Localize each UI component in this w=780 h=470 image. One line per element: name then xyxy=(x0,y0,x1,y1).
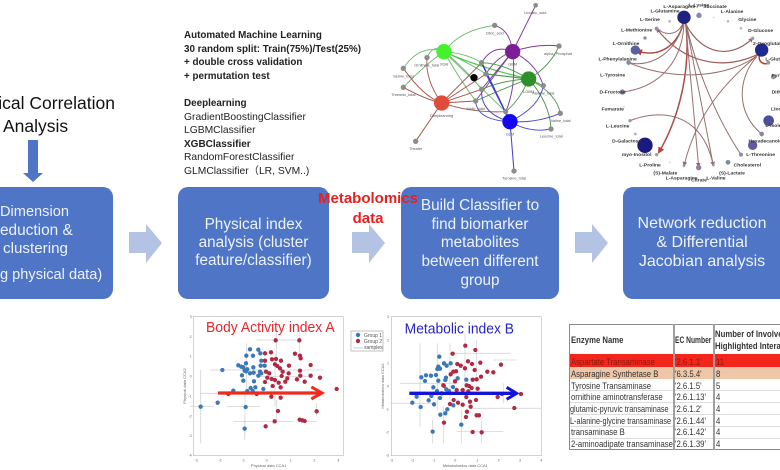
chart: metabolic index B scatter: 1 xyxy=(387,361,389,365)
chart: metabolic index B scatter: -2 xyxy=(411,459,414,463)
chart: metabolic index B scatter: Metabolomics data CCA1 xyxy=(443,463,489,468)
table: enzyme names and EC numbers: Enzyme Name xyxy=(571,335,623,345)
chart: body activity index A scatter: Body Activity index A xyxy=(206,319,335,336)
table: enzyme names and EC numbers: 4 xyxy=(716,392,720,402)
table: enzyme names and EC numbers: '2.6.1.42' xyxy=(675,427,706,437)
chart: metabolite interaction network: L-Tyrosine xyxy=(600,73,625,79)
chart: body activity index A scatter: 0 xyxy=(190,375,192,379)
table: enzyme names and EC numbers: transaminase B xyxy=(571,427,625,437)
chart: body activity index A scatter: 2 xyxy=(313,459,315,463)
chart: body activity index A scatter: 0 xyxy=(266,459,268,463)
chart: classifier network: Linoleic_acid xyxy=(524,11,546,15)
legend: group 1, group 2, samples: Group 2 xyxy=(364,339,382,345)
text block: automated machine learning settings: GradientBoostingClassifier xyxy=(184,112,306,123)
panel: dimension reduction box: Dimension xyxy=(0,204,69,220)
chart: classifier network: Alanine_total xyxy=(532,91,555,95)
chart: metabolite interaction network: (S)-Lactate xyxy=(719,171,745,177)
chart: metabolite interaction network: D-Galactose xyxy=(612,139,641,145)
panel: build classifier box: between different xyxy=(421,253,539,270)
heading: canonical correlation analysis: ical Correlation xyxy=(0,93,115,113)
chart: metabolic index B scatter: -1 xyxy=(386,408,389,412)
chart: classifier network: alpha_Phosphat xyxy=(544,52,573,56)
chart: body activity index A scatter: 1 xyxy=(290,459,292,463)
panel: network reduction box xyxy=(623,187,780,299)
chart: metabolic index B scatter: 3 xyxy=(519,459,521,463)
panel: dimension reduction box: g physical data) xyxy=(0,267,102,283)
text block: automated machine learning settings: + double cross validation xyxy=(184,57,302,68)
chart: body activity index A scatter: -3 xyxy=(194,459,198,463)
chart: classifier network: LGBM xyxy=(523,90,534,94)
chart: classifier network: Citric_acid xyxy=(486,31,504,35)
chart: metabolic index B scatter: 4 xyxy=(540,459,542,463)
table: enzyme names and EC numbers: '2.6.1.13' xyxy=(675,392,706,402)
text block: automated machine learning settings xyxy=(184,30,361,177)
table: enzyme names and EC numbers: 4 xyxy=(716,439,720,449)
table: enzyme names and EC numbers: 5 xyxy=(716,381,720,391)
chart: classifier network: Tyrosine_total xyxy=(502,177,526,181)
chart: metabolite interaction network: L-Glutamine xyxy=(650,9,680,15)
chart: metabolite interaction network: L-Asparagine xyxy=(663,4,695,10)
table: enzyme names and EC numbers: glutamic-pyruvic transaminase xyxy=(570,404,669,414)
chart: metabolite interaction network: L-Proline xyxy=(639,163,661,169)
table: enzyme names and EC numbers: Aspartate Transaminase xyxy=(571,357,655,367)
chart: metabolic index B scatter: -2 xyxy=(386,431,389,435)
chart: body activity index A scatter: -1 xyxy=(188,394,192,398)
panel: build classifier box: find biomarker xyxy=(432,216,528,233)
chart: metabolic index B scatter: 1 xyxy=(476,459,478,463)
chart: body activity index A scatter: -4 xyxy=(188,454,192,458)
panel: physical index analysis box: analysis (cluster xyxy=(199,234,308,251)
chart: classifier network: Valine_total xyxy=(551,119,571,123)
chart: classifier network: XGB xyxy=(440,63,448,67)
chart: metabolic index B scatter: 0 xyxy=(454,459,456,463)
legend: group 1, group 2, samples: Group 1 xyxy=(364,333,382,339)
chart: metabolite interaction network: Fumarate xyxy=(601,107,624,113)
chart: body activity index A scatter: 1 xyxy=(190,355,192,359)
chart: classifier network: Leucine_total xyxy=(540,135,563,139)
table: enzyme names and EC numbers: '2.6.1.2' xyxy=(675,404,702,414)
chart: metabolic index B scatter: -3 xyxy=(386,454,389,458)
table: enzyme names and EC numbers: L-alanine-glycine transaminase xyxy=(570,416,671,426)
chart: metabolic index B scatter: Metabolic index B xyxy=(405,320,514,337)
chart: body activity index A scatter: -3 xyxy=(188,434,192,438)
chart: metabolite interaction network: Citrate xyxy=(691,177,707,183)
table: enzyme names and EC numbers: '2.6.1.39' xyxy=(675,439,706,449)
text block: automated machine learning settings: LGBMClassifier xyxy=(184,125,256,136)
chart: metabolic index B scatter: 2 xyxy=(387,338,389,342)
chart: classifier network: Serine_total xyxy=(393,74,414,78)
text: GLMClassifier（LR, SVM..) xyxy=(184,166,309,177)
table: enzyme names and EC numbers: '2.6.1.44' xyxy=(675,416,706,426)
table: enzyme names and EC numbers: '2.6.1.1' xyxy=(675,357,702,367)
text block: automated machine learning settings: Deeplearning xyxy=(184,98,247,109)
text block: automated machine learning settings: + permutation test xyxy=(184,71,270,82)
chart: metabolic index B scatter: 3 xyxy=(387,315,389,319)
text block: automated machine learning settings: XGBClassifier xyxy=(184,139,251,150)
chart: classifier network: Ornithine_total xyxy=(414,64,439,68)
chart: classifier network: Threonic_total xyxy=(391,93,416,97)
chart: metabolite interaction network: D-Fructose xyxy=(600,89,626,95)
panel: physical index analysis box: feature/classifier) xyxy=(195,252,312,269)
chart: body activity index A scatter: Physical data CCA2 xyxy=(182,367,187,404)
table: enzyme names and EC numbers xyxy=(569,324,780,451)
text block: automated machine learning settings: 30 random split: Train(75%)/Test(25%) xyxy=(184,44,361,55)
table: enzyme names and EC numbers: Tyrosine Transaminase xyxy=(571,381,651,391)
legend: group 1, group 2, samples: samples xyxy=(364,345,383,351)
chart: metabolite interaction network: L-Lysine xyxy=(689,2,709,8)
chart: metabolite interaction network: L-Phenylalanine xyxy=(599,56,637,62)
panel: physical index analysis box xyxy=(178,187,329,299)
panel: dimension reduction box: eduction & xyxy=(0,222,73,239)
chart: metabolite interaction network: Succinate xyxy=(703,4,727,10)
chart: metabolite interaction network: L-Leucine xyxy=(606,123,630,129)
heading: canonical correlation analysis xyxy=(0,93,115,136)
chart: body activity index A scatter: 3 xyxy=(337,459,339,463)
panel: dimension reduction box xyxy=(0,187,113,299)
panel: dimension reduction box: clustering xyxy=(3,240,68,257)
chart: metabolite interaction network: Glycine xyxy=(738,17,757,23)
chart: body activity index A scatter: Physical data CCA1 xyxy=(251,463,287,468)
chart: classifier network: Deeplearning xyxy=(430,114,453,118)
chart: body activity index A scatter: 3 xyxy=(190,315,192,319)
panel: build classifier box xyxy=(401,187,559,299)
heading: canonical correlation analysis: Analysis xyxy=(3,116,68,136)
table: enzyme names and EC numbers: 8 xyxy=(716,369,720,379)
chart: classifier network: GLM xyxy=(506,133,514,137)
chart: metabolite interaction network: myo-Inositol xyxy=(622,152,652,158)
chart: body activity index A scatter: -1 xyxy=(242,459,245,463)
chart: metabolite interaction network: L-Valine xyxy=(706,176,726,182)
chart: metabolite interaction network: D-Glucose xyxy=(748,28,773,34)
chart: metabolite interaction network: L-Ornithine xyxy=(613,41,640,47)
table: enzyme names and EC numbers: Asparagine Synthetase B xyxy=(571,369,658,379)
chart: body activity index A scatter: -2 xyxy=(218,459,222,463)
table: enzyme names and EC numbers: 4 xyxy=(716,404,720,414)
table: enzyme names and EC numbers: '2.6.1.5' xyxy=(675,381,702,391)
panel: network reduction box: & Differential xyxy=(656,234,748,251)
text block: automated machine learning settings: Automated Machine Learning xyxy=(184,30,322,41)
chart: classifier network: GBM xyxy=(508,62,517,66)
label: metabolomics data xyxy=(318,190,418,227)
chart: metabolite interaction network: L-Serine xyxy=(640,17,660,23)
panel: build classifier box: metabolites xyxy=(441,234,519,251)
chart: metabolite interaction network: L-Methionine xyxy=(621,28,652,34)
label: metabolomics data: Metabolomics xyxy=(318,190,418,207)
table: enzyme names and EC numbers: 11 xyxy=(716,357,724,367)
table: enzyme names and EC numbers: '6.3.5.4' xyxy=(675,369,702,379)
chart: body activity index A scatter: 2 xyxy=(190,335,192,339)
panel: build classifier box: Build Classifier to xyxy=(421,197,539,214)
chart: body activity index A scatter: -2 xyxy=(188,414,192,418)
chart: metabolite interaction network: L-Asparagine xyxy=(666,176,698,182)
chart: classifier network: Malic_total xyxy=(466,107,485,111)
chart: metabolite interaction network: L-Threonine xyxy=(746,152,775,158)
chart: metabolite interaction network: L-Alanine xyxy=(721,9,744,15)
text block: automated machine learning settings: RandomForestClassifier xyxy=(184,152,294,163)
panel: physical index analysis box: Physical index xyxy=(205,216,302,233)
label: metabolomics data: data xyxy=(353,210,383,227)
chart: classifier network: Theater xyxy=(409,147,423,151)
panel: build classifier box: group xyxy=(460,272,500,289)
panel: network reduction box: Network reduction xyxy=(638,215,766,232)
chart: metabolite interaction network: Cholesterol xyxy=(734,163,762,169)
panel: network reduction box: Jacobian analysis xyxy=(639,253,765,270)
chart: metabolic index B scatter: 0 xyxy=(387,384,389,388)
table: enzyme names and EC numbers: 4 xyxy=(716,416,720,426)
table: enzyme names and EC numbers: 2-aminoadipate transaminase xyxy=(571,439,673,449)
table: enzyme names and EC numbers: ornithine aminotransferase xyxy=(571,392,663,402)
table: enzyme names and EC numbers: 4 xyxy=(716,427,720,437)
chart: metabolic index B scatter: -1 xyxy=(432,459,436,463)
chart: metabolic index B scatter: Metabolomics data CCA2 xyxy=(380,363,385,409)
chart: metabolite interaction network: (S)-Malate xyxy=(653,171,677,177)
table: enzyme names and EC numbers: EC Number xyxy=(675,335,711,345)
chart: metabolic index B scatter: -3 xyxy=(390,459,393,463)
chart: metabolic index B scatter: 2 xyxy=(498,459,500,463)
